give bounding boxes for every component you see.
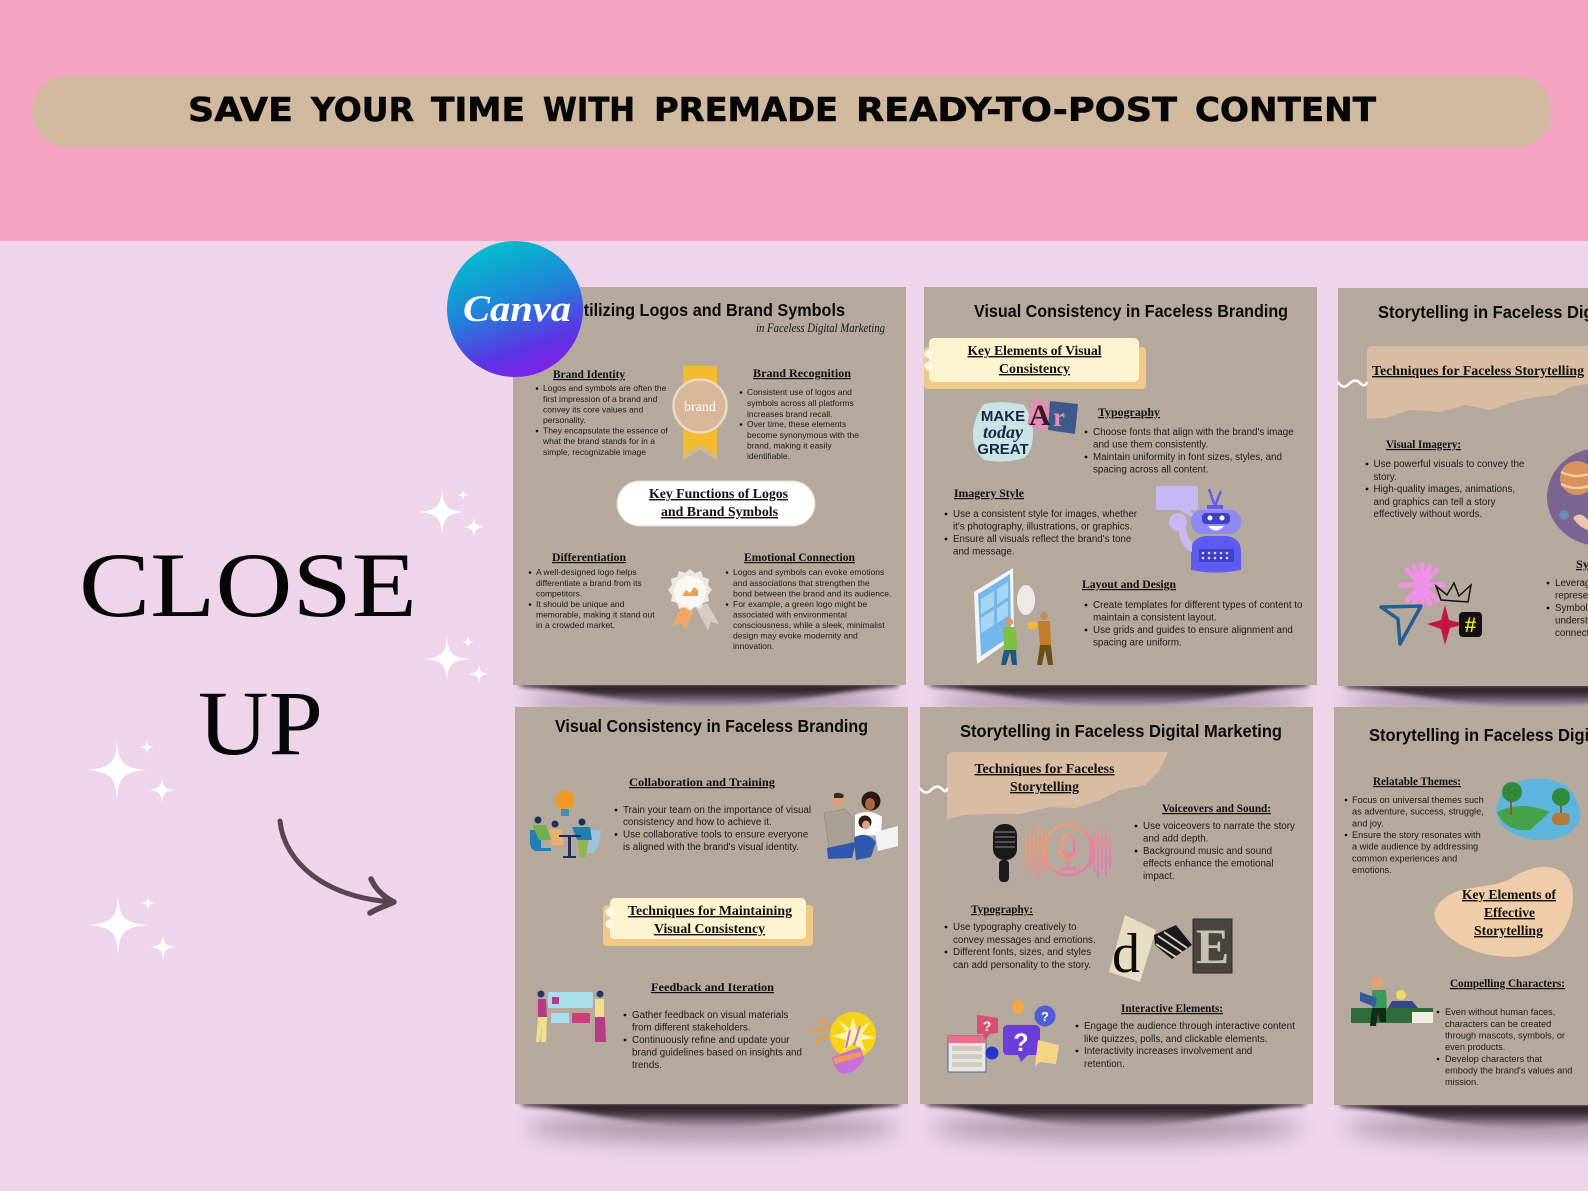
text: visual imagery: story.: [1374, 472, 1397, 483]
text: typography: and use them consistently.: [1093, 440, 1208, 450]
panel: storytelling 3: [1334, 707, 1588, 1105]
text: brand identity: convey its core values and: [543, 404, 643, 414]
text: voiceovers: Background music and sound: [1143, 846, 1272, 857]
text: emotional connection: Logos and symbols can evoke emotions: [733, 567, 884, 577]
text: interactive: [1076, 1021, 1295, 1070]
text: symbolism: [1547, 578, 1588, 639]
text: emotional connection: For example, a green logo might be: [733, 599, 867, 609]
text: compelling characters: through mascots, symbols, or: [1445, 1030, 1565, 1040]
icon: planet blob: [1547, 448, 1588, 546]
banner headline: READY-TO-POST: [856, 90, 1178, 129]
heading: compelling characters: Compelling Characters:: [1450, 976, 1565, 990]
text: typography: Use typography creatively to: [953, 922, 1077, 933]
text: compelling characters: embody the brand's values and: [1445, 1066, 1572, 1076]
text: brand identity: [536, 383, 668, 457]
text: emotional connection: [726, 567, 891, 651]
text: relatable themes: and joy.: [1352, 818, 1384, 828]
squiggle: [920, 787, 947, 793]
text: voiceovers: Use voiceovers to narrate the story: [1143, 821, 1295, 832]
heading: relatable themes: Relatable Themes:: [1373, 774, 1461, 788]
text: feedback: from different stakeholders.: [632, 1022, 751, 1034]
icon: make today great sticker: today: [983, 422, 1024, 442]
blob: key elements: Key Elements of: [1462, 888, 1556, 903]
text: brand identity: personality.: [543, 415, 586, 425]
blob: key elements: Effective: [1484, 906, 1535, 921]
icon: question bubbles: ?: [983, 1018, 991, 1034]
text: imagery style: [945, 509, 1138, 558]
text: compelling characters: even products.: [1445, 1042, 1505, 1052]
text: brand recognition: become synonymous with the: [747, 430, 859, 440]
icon: brand ribbon: [674, 366, 726, 460]
banner headline: [188, 90, 1376, 129]
text: typography: [945, 922, 1096, 971]
heading: typography: Typography: [1098, 405, 1160, 419]
icon: Ar letters: [1027, 398, 1078, 434]
text: compelling characters: Even without human faces,: [1445, 1007, 1555, 1017]
icon: collage letters: [1109, 915, 1232, 985]
icon: make today great sticker: [973, 402, 1033, 462]
note card: techniques: Techniques for Maintaining: [628, 904, 792, 919]
text: interactive: retention.: [1084, 1059, 1125, 1070]
heading: brand recognition: Brand Recognition: [753, 366, 851, 380]
text: voiceovers: and add depth.: [1143, 834, 1208, 844]
pill: key functions: Key Functions of Logos: [649, 487, 789, 502]
text: layout and design: Use grids and guides to ensure alignment and: [1093, 625, 1293, 636]
text: emotional connection: associated with environmental: [733, 610, 847, 620]
heading: feedback: Feedback and Iteration: [651, 980, 774, 994]
banner pill: [32, 76, 1552, 147]
heading: techniques: Techniques for Faceless Storytelling: [1372, 364, 1584, 379]
torn paper: techniques: [947, 752, 1168, 819]
icon: brand ribbon: brand: [684, 400, 716, 415]
text: relatable themes: Ensure the story resonates with: [1352, 830, 1481, 840]
text: visual imagery: [1366, 459, 1525, 520]
text: relatable themes: as adventure, success, struggle,: [1352, 806, 1484, 816]
text: voiceovers: [1135, 821, 1295, 882]
icon: make today great sticker: MAKE: [981, 408, 1025, 425]
heading: voiceovers: Voiceovers and Sound:: [1162, 801, 1271, 815]
text: differentiation: memorable, making it stand out: [536, 610, 655, 620]
heading: visual imagery: Visual Imagery:: [1386, 437, 1461, 451]
text: imagery style: it's photography, illustrations, or graphics.: [953, 522, 1132, 532]
icon: microphone: [993, 824, 1017, 882]
icon: question bubbles: ?: [1013, 1029, 1029, 1057]
note card: key elements: Key Elements of Visual: [968, 344, 1102, 359]
text: imagery style: Ensure all visuals reflect the brand's tone: [953, 534, 1132, 545]
icon: Ar letters: r: [1053, 402, 1065, 432]
banner headline: SAVE: [188, 90, 293, 129]
banner headline: YOUR: [310, 90, 414, 129]
icon: kids on book: [1351, 976, 1433, 1026]
text: voiceovers: impact.: [1143, 871, 1175, 882]
text: visual imagery: High-quality images, animations,: [1374, 484, 1515, 495]
text: differentiation: [529, 567, 655, 630]
text: layout and design: [1085, 600, 1303, 648]
text: brand recognition: Over time, these elements: [747, 419, 846, 429]
note card: techniques: [603, 898, 813, 946]
text: relatable themes: common experiences and: [1352, 854, 1457, 864]
text: layout and design: spacing are uniform.: [1093, 638, 1182, 648]
squiggle: [1338, 381, 1367, 387]
icon: light bulb: [814, 1012, 876, 1074]
text: typography: Maintain uniformity in font sizes, styles, and: [1093, 452, 1282, 463]
page shadows: bottom row: [519, 1103, 1588, 1143]
note card: key elements: Consistency: [999, 362, 1070, 377]
text: compelling characters: Develop characters that: [1445, 1054, 1542, 1064]
pill: key functions: [617, 481, 815, 526]
text: voiceovers: effects enhance the emotional: [1143, 858, 1274, 870]
text: visual imagery: Use powerful visuals to convey the: [1374, 459, 1525, 470]
icon: collage letters: d: [1112, 923, 1140, 985]
text: interactive: Interactivity increases involvement and: [1084, 1046, 1252, 1057]
heading: close up: UP: [198, 672, 323, 774]
heading: differentiation: Differentiation: [552, 550, 626, 564]
text: feedback: Continuously refine and update your: [632, 1035, 790, 1046]
banner headline: TIME: [431, 90, 525, 129]
text: collaboration: [615, 805, 811, 853]
torn paper: techniques: [1367, 346, 1588, 419]
text: interactive: Engage the audience through interactive content: [1084, 1021, 1295, 1032]
text: brand identity: They encapsulate the essence of: [543, 426, 668, 436]
heading: interactive: Interactive Elements:: [1121, 1001, 1223, 1015]
banner headline: PREMADE: [654, 90, 838, 129]
text: differentiation: in a crowded market.: [536, 620, 615, 630]
text: differentiation: It should be unique and: [536, 599, 625, 609]
text: compelling characters: [1437, 1007, 1572, 1087]
icon: question bubbles: [948, 1000, 1059, 1072]
text: brand recognition: increases brand recall.: [747, 409, 833, 419]
text: emotional connection: design may evoke modernity and: [733, 630, 858, 640]
text: imagery style: Use a consistent style for images, whether: [953, 509, 1138, 520]
icon: robot: [1156, 486, 1241, 572]
heading: emotional connection: Emotional Connection: [744, 550, 855, 564]
banner headline: CONTENT: [1195, 90, 1376, 129]
text: feedback: [624, 1010, 802, 1071]
text: brand recognition: symbols across all platforms: [747, 398, 854, 408]
note card: techniques: Visual Consistency: [654, 922, 765, 937]
logo: canva: [447, 241, 583, 377]
heading: collaboration: Collaboration and Training: [629, 775, 775, 789]
icon: award badge: [668, 569, 719, 630]
text: brand recognition: brand, making it easily: [747, 440, 832, 450]
title: Visual Consistency in Faceless Branding: [974, 301, 1288, 321]
icon: feedback board: [536, 990, 606, 1042]
icon: pink soundwave: [1026, 825, 1110, 878]
text: typography: Different fonts, sizes, and styles: [953, 947, 1091, 958]
text: typography: convey messages and emotions.: [953, 935, 1096, 946]
text: relatable themes: a wide audience by addressing: [1352, 842, 1478, 852]
banner headline: WITH: [543, 90, 635, 129]
text: compelling characters: mission.: [1445, 1077, 1479, 1087]
text: brand identity: Logos and symbols are often the: [543, 383, 667, 393]
text: differentiation: A well-designed logo helps: [536, 567, 637, 577]
text: typography: Choose fonts that align with the brand's image: [1093, 427, 1294, 438]
text: feedback: Gather feedback on visual materials: [632, 1010, 788, 1021]
blob: key elements: [1434, 867, 1573, 957]
icon: three colleagues: [824, 792, 898, 860]
icon: Ar letters: A: [1029, 399, 1051, 432]
heading: layout and design: Layout and Design: [1082, 577, 1176, 591]
text: layout and design: Create templates for different types of content to: [1093, 600, 1303, 611]
text: emotional connection: bond between the brand and its audience.: [733, 588, 891, 598]
heading: imagery style: Imagery Style: [954, 486, 1025, 500]
panel: storytelling 1: [1338, 288, 1588, 686]
panel: storytelling 2: [920, 707, 1313, 1104]
icon: question bubbles: ?: [1041, 1009, 1049, 1024]
heading: techniques: [974, 762, 1115, 795]
text: collaboration: is aligned with the brand's visual identity.: [623, 842, 799, 853]
page shadows: top row: [517, 684, 1588, 717]
arrow: curved pointing right: [280, 821, 394, 913]
icon: collage letters: E: [1196, 918, 1229, 974]
text: brand identity: simple, recognizable image: [543, 447, 646, 457]
icon: phone and people: [974, 568, 1053, 665]
panel: utilizing logos and brand symbols: [513, 287, 906, 685]
note card: key elements: [924, 338, 1146, 389]
text: visual imagery: and graphics can tell a story: [1374, 497, 1496, 508]
text: feedback: brand guidelines based on insights and: [632, 1048, 802, 1058]
heading: close up: [79, 534, 417, 774]
text: collaboration: Train your team on the importance of visual: [623, 805, 811, 816]
blob: key elements: Storytelling: [1474, 924, 1543, 939]
title: Utilizing Logos and Brand Symbols: [572, 300, 845, 320]
icon: symbol cluster: #: [1465, 614, 1477, 637]
heading: close up: CLOSE: [79, 534, 417, 636]
text: emotional connection: innovation.: [733, 641, 774, 651]
icon: nature scene: [1496, 778, 1580, 840]
title: Visual Consistency in Faceless Branding: [555, 716, 868, 736]
logo: canva: Canva: [463, 289, 571, 330]
text: brand recognition: [740, 387, 859, 461]
text: imagery style: and message.: [953, 546, 1015, 558]
sparkles: [87, 488, 490, 961]
header band: pink: [0, 0, 1588, 241]
icon: make today great sticker: GREAT: [977, 441, 1029, 458]
pill: key functions: and Brand Symbols: [661, 505, 779, 520]
text: visual imagery: effectively without words.: [1374, 509, 1482, 520]
text: typography: can add personality to the story.: [953, 960, 1091, 971]
text: relatable themes: Focus on universal themes such: [1352, 795, 1484, 805]
heading: techniques: Techniques for Faceless: [974, 762, 1115, 777]
text: brand recognition: identifiable.: [747, 451, 790, 461]
text: collaboration: Use collaborative tools to ensure everyone: [623, 830, 809, 840]
text: typography: spacing across all content.: [1093, 464, 1208, 476]
panel: visual consistency 1: [924, 287, 1317, 685]
text: emotional connection: consciousness, while a sleek, minimalist: [733, 620, 885, 630]
text: typography: [1085, 427, 1294, 476]
text: brand identity: what the brand stands for in a: [542, 436, 655, 446]
script subtitle: in Faceless Digital Marketing: [756, 320, 885, 335]
text: brand identity: first impression of a brand and: [543, 394, 658, 404]
text: differentiation: differentiate a brand from its: [536, 578, 642, 588]
text: brand recognition: Consistent use of logos and: [747, 387, 852, 397]
heading: techniques: Storytelling: [1010, 780, 1079, 795]
text: interactive: like quizzes, polls, and clickable elements.: [1084, 1034, 1268, 1045]
text: relatable themes: [1345, 795, 1484, 875]
text: relatable themes: emotions.: [1352, 865, 1392, 875]
text: feedback: trends.: [632, 1060, 662, 1071]
heading: brand identity: Brand Identity: [553, 367, 625, 381]
panel: visual consistency 2: [515, 707, 908, 1104]
text: emotional connection: and associations that strengthen the: [733, 578, 870, 588]
text: differentiation: competitors.: [536, 588, 582, 598]
title: Storytelling in Faceless Digital Marketing: [960, 721, 1282, 741]
icon: symbol cluster: [1381, 564, 1482, 645]
text: collaboration: consistency and how to achieve it.: [623, 817, 772, 828]
heading: typography: Typography:: [971, 902, 1033, 916]
icon: team meeting: [530, 790, 601, 858]
text: layout and design: maintain a consistent layout.: [1093, 612, 1217, 624]
text: compelling characters: characters can be created: [1445, 1019, 1551, 1029]
